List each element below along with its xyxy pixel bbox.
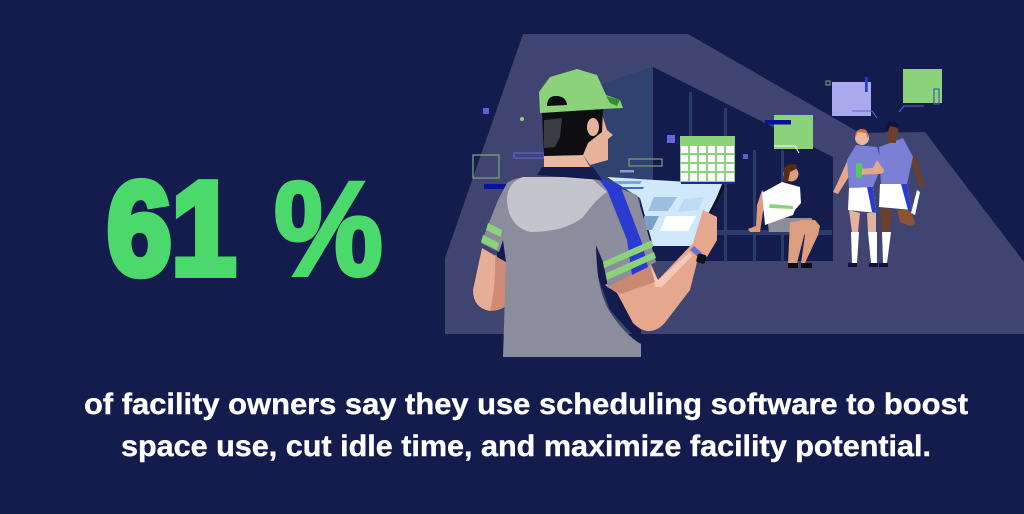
icon: calendar	[680, 136, 735, 184]
shirt hood highlight	[507, 177, 607, 232]
backpack strap	[597, 177, 648, 275]
head	[784, 166, 798, 182]
underarm shadow	[596, 245, 641, 344]
statistic: 61 percent: 61	[107, 155, 236, 302]
shorts	[767, 218, 813, 232]
illustration: standing player with bottle	[833, 129, 884, 267]
shirt	[762, 182, 801, 225]
hair	[542, 109, 603, 156]
sleeve stripes	[481, 223, 656, 280]
statistic: 61 percent	[107, 155, 383, 304]
caption text: of facility owners say they use scheduling software to boost	[84, 388, 968, 421]
wristband and watch	[690, 246, 702, 257]
building background	[445, 34, 1024, 334]
cap	[539, 69, 623, 113]
speech panels	[743, 69, 942, 159]
illustration: seated player on bench	[748, 164, 820, 268]
shoes	[788, 263, 798, 268]
floating decorative shapes	[473, 108, 675, 189]
statistic: 61 percent: %	[274, 155, 383, 304]
caption text: space use, cut idle time, and maximize facility potential.	[121, 430, 931, 463]
arm	[748, 190, 768, 232]
collar	[537, 167, 602, 180]
panel: tablet	[607, 177, 725, 246]
neck and face	[544, 155, 590, 167]
legs	[788, 220, 806, 263]
locker room interior	[595, 67, 833, 262]
caption text	[84, 388, 968, 463]
illustration: standing player stretching	[879, 121, 925, 267]
left arm	[473, 248, 507, 311]
ear	[587, 118, 599, 136]
right arm and hand	[605, 210, 717, 331]
shirt	[481, 177, 656, 357]
illustration: man with cap holding tablet	[473, 69, 717, 357]
